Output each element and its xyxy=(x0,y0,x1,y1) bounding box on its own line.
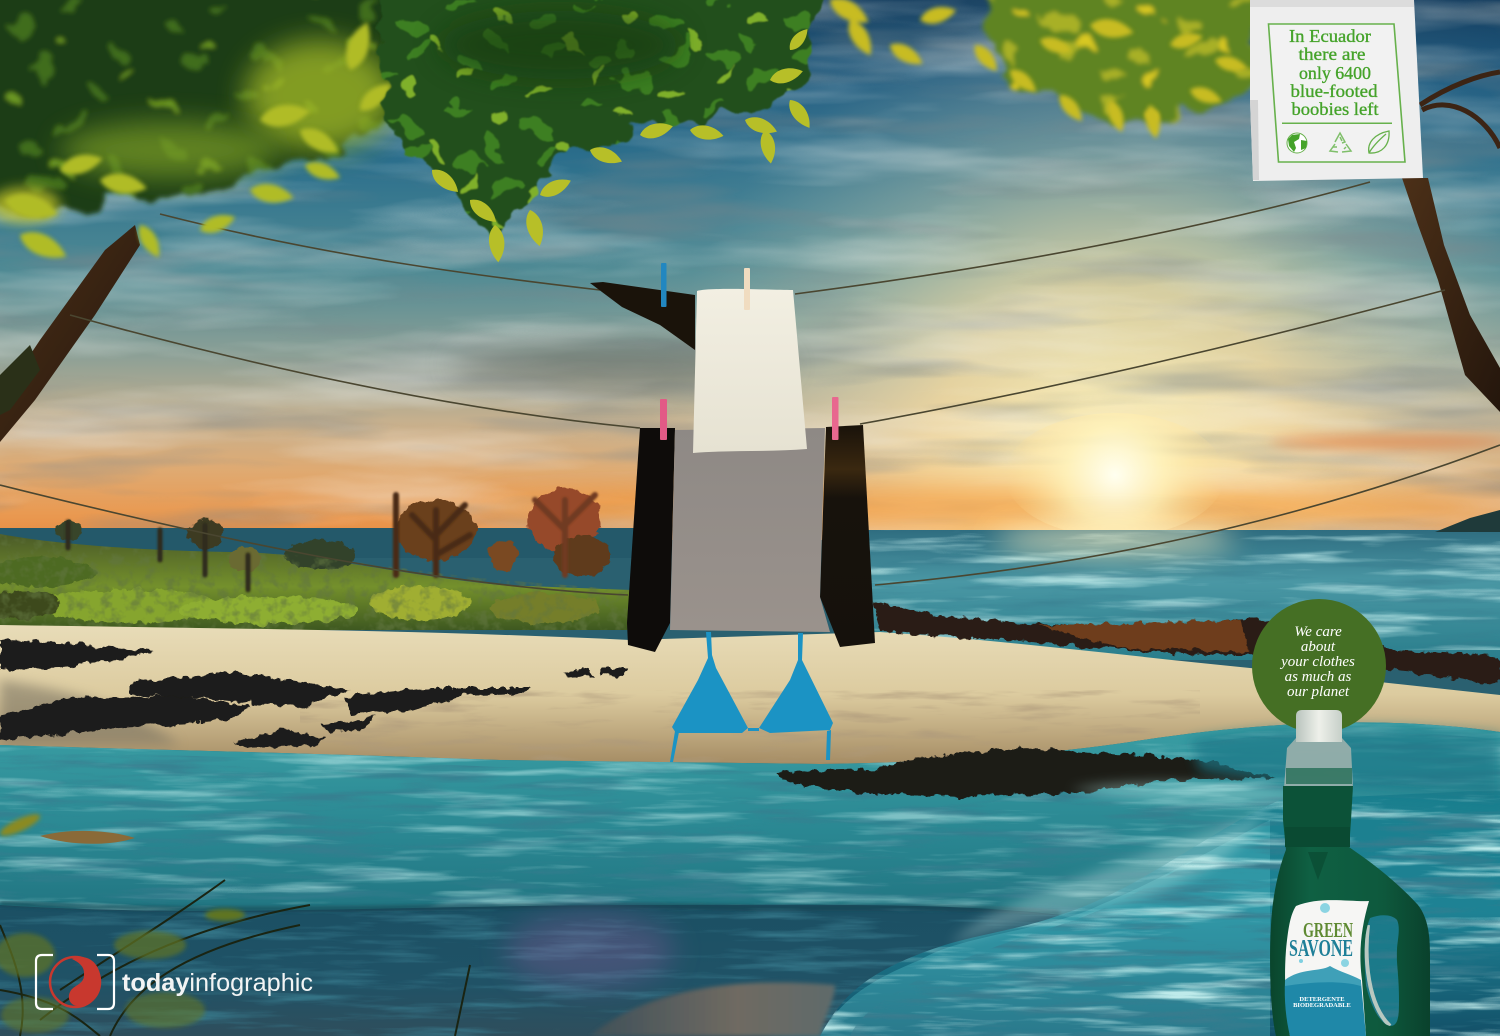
wing: black cloth xyxy=(590,282,695,350)
breaking waves at lower right xyxy=(820,727,1500,1036)
product label: BIODEGRADABLE xyxy=(1293,1002,1351,1009)
icon: recycling xyxy=(1330,133,1351,152)
right sleeve xyxy=(820,425,875,647)
cactus trees xyxy=(55,488,610,576)
dark shallows and wet sand at the bottom xyxy=(0,903,1060,1036)
label text: In Ecuador xyxy=(1289,26,1371,46)
left pink peg xyxy=(660,399,667,440)
bottle neck xyxy=(1283,786,1353,850)
green slogan circle: We care xyxy=(1294,624,1342,640)
green slogan circle: about xyxy=(1301,639,1336,655)
low shrubs xyxy=(0,540,600,624)
towel, shirt and trousers hung as a blue-footed booby xyxy=(590,263,875,762)
green slogan circle xyxy=(1252,599,1386,733)
right tree trunk xyxy=(1402,72,1500,412)
dark rocks on the sand xyxy=(0,604,1500,749)
clothes lines xyxy=(0,182,1500,595)
white towel head xyxy=(693,289,807,453)
grey shirt body xyxy=(670,428,830,632)
blue peg xyxy=(661,263,666,307)
label text xyxy=(1289,26,1378,119)
foliage: top right branch xyxy=(826,0,1260,140)
green border xyxy=(1268,24,1405,162)
bottle body and handle xyxy=(1270,847,1430,1036)
right pink peg xyxy=(832,397,838,440)
dark rocks in the water xyxy=(775,748,1275,797)
logo: todayinfographic xyxy=(36,955,313,1009)
vegetation on the far shore xyxy=(0,488,630,630)
handle opening xyxy=(1365,915,1399,1026)
product label: DETERGENTE xyxy=(1299,996,1345,1003)
sewn fabric label xyxy=(1250,0,1423,181)
product label xyxy=(1285,900,1369,1036)
label text: boobies left xyxy=(1292,99,1378,119)
green slogan circle: your clothes xyxy=(1279,654,1355,670)
green slogan circle: as much as xyxy=(1285,669,1351,685)
distant sea xyxy=(0,510,1500,660)
blue bikini feet xyxy=(670,632,833,762)
product label: GREEN xyxy=(1303,918,1353,942)
left sleeve xyxy=(627,428,675,652)
detergent bottle xyxy=(1270,710,1430,1036)
bottle collar xyxy=(1284,738,1353,788)
label text: blue-footed xyxy=(1290,81,1378,101)
foreground water xyxy=(0,722,1500,1036)
foliage: bottom left twigs xyxy=(0,810,470,1036)
logo wordmark: todayinfographic xyxy=(122,969,313,997)
foliage: top left tree xyxy=(0,0,460,266)
cream peg xyxy=(744,268,750,310)
product label: SAVONE xyxy=(1289,936,1353,962)
bottle cap xyxy=(1296,710,1342,742)
sand beach xyxy=(0,625,1500,764)
icon: globe xyxy=(1287,133,1307,153)
logo red circle xyxy=(50,957,101,1007)
foliage: centre branch xyxy=(379,0,820,263)
green slogan circle: our planet xyxy=(1287,684,1350,700)
icon: leaf xyxy=(1369,131,1389,153)
label text: there are xyxy=(1298,44,1366,64)
logo frame brackets xyxy=(36,955,114,1009)
left tree trunk xyxy=(0,225,140,442)
label text: only 6400 xyxy=(1299,63,1371,83)
background: sunset sky xyxy=(0,0,1500,540)
